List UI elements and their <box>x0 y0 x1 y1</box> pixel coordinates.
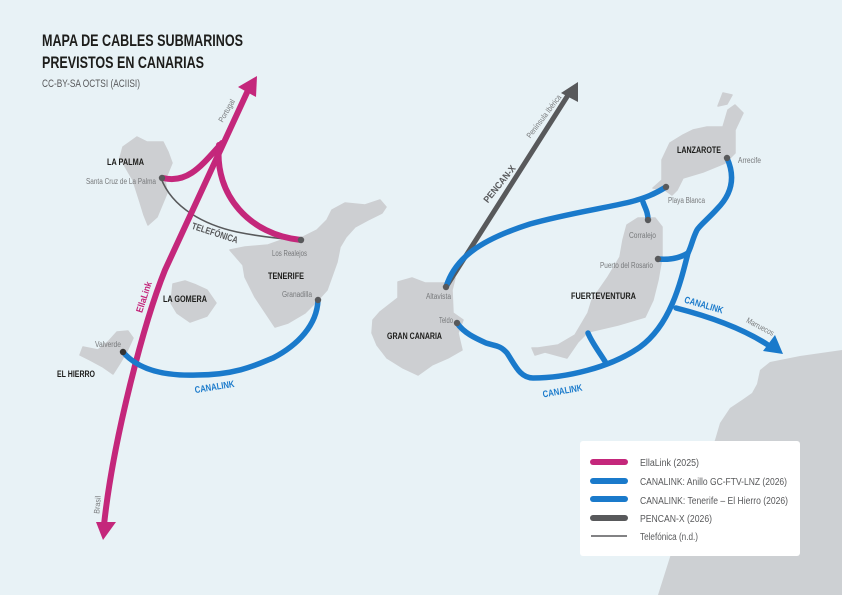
EllaLink cable with arrows <box>96 76 301 540</box>
landing point labels: Arrecife <box>738 156 761 165</box>
cable name labels: EllaLink <box>134 280 155 314</box>
arrowhead: Portugal <box>238 76 257 97</box>
legend item: EllaLink <box>593 458 699 469</box>
ring: Arrecife to Teldo <box>457 158 732 378</box>
subtitle credit: CC-BY-SA OCTSI (ACIISI) <box>42 78 140 90</box>
destination labels <box>92 93 776 514</box>
cable name labels <box>134 163 725 400</box>
landing point labels: Los Realejos <box>272 249 307 258</box>
branch: Corralejo <box>643 202 648 220</box>
cable name labels: CANALINK <box>542 383 583 400</box>
EllaLink branch: La Palma <box>163 143 222 179</box>
arrowhead: Brasil <box>96 522 116 540</box>
landing point labels: Valverde <box>95 340 121 349</box>
PENCAN-X line <box>446 92 570 287</box>
island names: LA PALMA <box>107 157 144 167</box>
landing point labels <box>86 156 761 349</box>
CANALINK Tenerife – El Hierro cable <box>123 300 318 375</box>
island: Lanzarote <box>653 105 743 195</box>
landing point labels: Playa Blanca <box>668 196 705 205</box>
branch: Marruecos <box>676 308 768 345</box>
landing point labels: Puerto del Rosario <box>600 261 653 270</box>
arrowhead: Marruecos <box>763 335 783 354</box>
legend panel <box>580 441 800 556</box>
legend <box>580 441 800 556</box>
legend item: Telefónica <box>591 532 698 543</box>
landing point labels: Teldo <box>439 316 453 325</box>
island names: LANZAROTE <box>677 145 721 155</box>
legend item: CANALINK Tenerife: CANALINK: Tenerife – El Hierro (2026) <box>640 496 788 507</box>
CANALINK ring cable <box>446 158 783 378</box>
island: El Hierro <box>80 331 133 374</box>
title <box>42 31 243 72</box>
island: La Palma <box>120 137 172 225</box>
island: Tenerife <box>230 200 386 327</box>
legend item: CANALINK ring: CANALINK: Anillo GC-FTV-LNZ (2026) <box>640 477 787 488</box>
title line 1: MAPA DE CABLES SUBMARINOS <box>42 31 243 50</box>
Africa coastline <box>658 350 842 595</box>
branch: Puerto del Rosario <box>658 253 688 259</box>
Telefónica cable <box>161 178 301 240</box>
island: Gran Canaria <box>372 278 463 375</box>
landing point labels: Corralejo <box>629 231 656 240</box>
legend item: Telefónica: Telefónica (n.d.) <box>640 532 698 543</box>
destination labels: Portugal <box>217 98 237 124</box>
legend item: EllaLink: EllaLink (2025) <box>640 458 699 469</box>
island names: LA GOMERA <box>163 294 207 304</box>
island names: TENERIFE <box>268 271 304 281</box>
title line 2: PREVISTOS EN CANARIAS <box>42 53 204 72</box>
landing point dots <box>120 155 730 355</box>
ring: Altavista to Playa Blanca <box>446 187 666 287</box>
EllaLink branch: Tenerife <box>219 145 301 240</box>
arrowhead: PENCAN-X <box>561 82 578 102</box>
island names: GRAN CANARIA <box>387 331 442 341</box>
cable name labels: CANALINK <box>683 295 725 316</box>
island names <box>57 145 721 379</box>
islet: La Graciosa <box>718 93 732 106</box>
island names: FUERTEVENTURA <box>571 291 636 301</box>
landing point labels: Granadilla <box>282 290 312 299</box>
branch: south Fuerteventura <box>588 333 606 363</box>
destination labels: Península Ibérica <box>525 93 564 140</box>
island names: EL HIERRO <box>57 369 95 379</box>
EllaLink main line <box>104 86 250 525</box>
cable name labels: TELEFÓNICA <box>190 220 240 246</box>
cable name labels: PENCAN-X <box>482 163 519 205</box>
legend item: PENCAN-X <box>593 514 712 525</box>
island: La Gomera <box>171 281 216 322</box>
landing point labels: Altavista <box>426 292 451 301</box>
island: Fuerteventura <box>532 218 662 358</box>
cable name labels: CANALINK <box>194 379 235 396</box>
destination labels: Brasil <box>92 495 103 514</box>
destination labels: Marruecos <box>745 316 776 338</box>
PENCAN-X cable with arrow <box>446 82 578 287</box>
landing point labels: Santa Cruz de La Palma <box>86 177 156 186</box>
legend item: PENCAN-X: PENCAN-X (2026) <box>640 514 712 525</box>
